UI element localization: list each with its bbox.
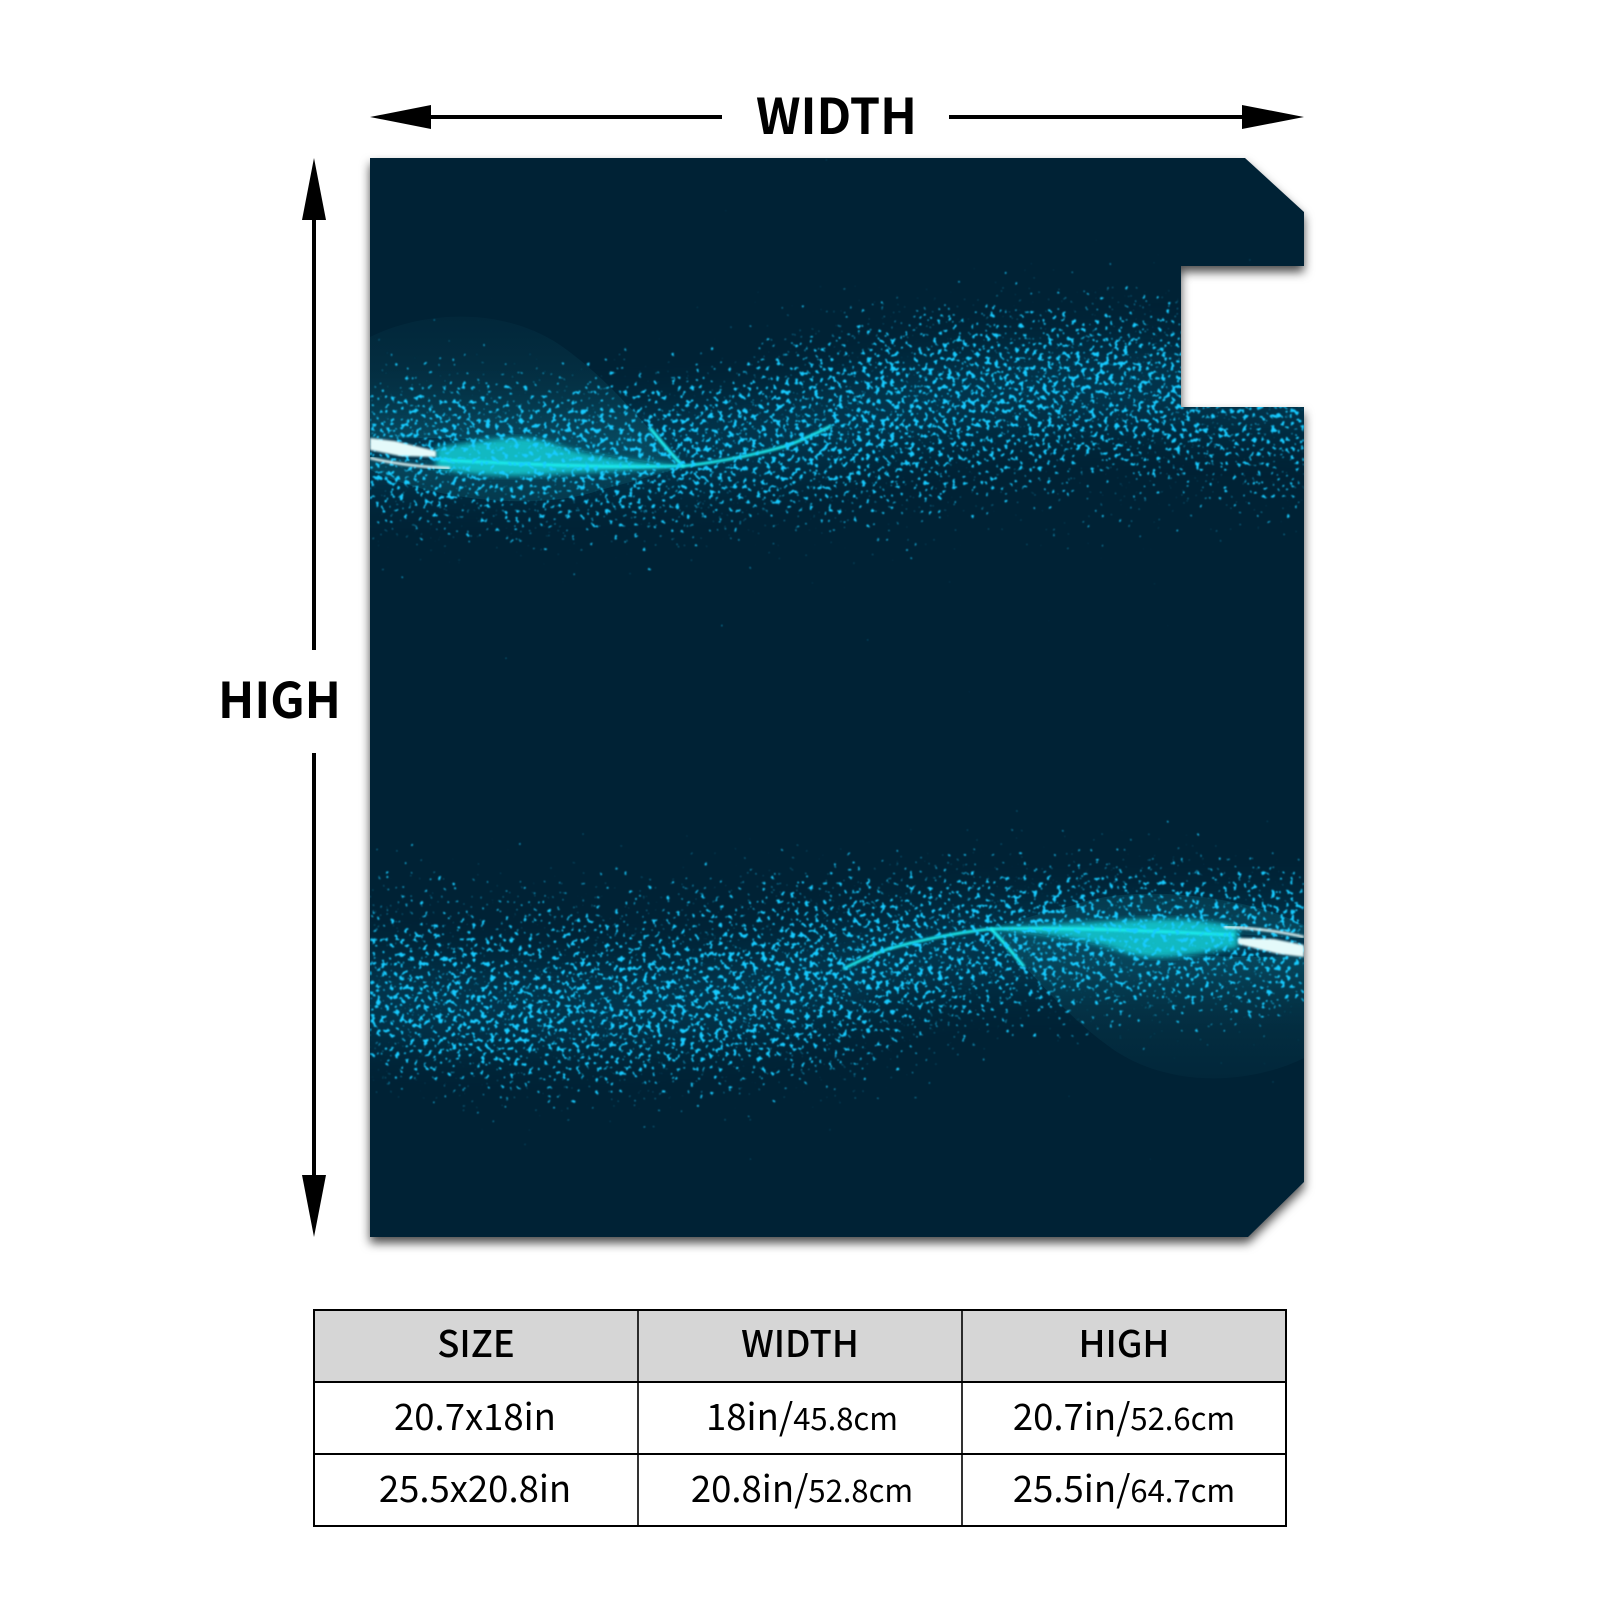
width dimension arrow: [370, 105, 1304, 129]
row 20.7x18in: 20.7x18in: [394, 1388, 556, 1441]
top glowing wave: [370, 344, 833, 502]
row 20.7x18in: 20.7in/52.6cm: [1013, 1388, 1235, 1441]
table header background: [314, 1310, 1286, 1382]
row 20.7x18in: 18in/45.8cm: [706, 1388, 898, 1441]
height dimension arrow: [302, 158, 326, 1237]
bottom soft glow: [274, 943, 1424, 1007]
top soft glow: [250, 388, 1400, 452]
row 20.7x18in: [394, 1388, 1235, 1441]
bottom particle field: [274, 853, 1424, 1097]
height label: HIGH: [218, 662, 341, 733]
bottom glowing wave: [841, 894, 1304, 1052]
panel: dark mailbox cover with particle waves: [362, 156, 1312, 1251]
header row: [437, 1315, 1169, 1368]
header row: HIGH: [1079, 1315, 1169, 1368]
row 25.5x20.8in: [379, 1460, 1235, 1513]
row 25.5x20.8in: 20.8in/52.8cm: [691, 1460, 913, 1513]
row 25.5x20.8in: 25.5in/64.7cm: [1013, 1460, 1235, 1513]
top particle field: [250, 298, 1400, 542]
header row: WIDTH: [741, 1315, 859, 1368]
width label: WIDTH: [756, 78, 917, 149]
row 25.5x20.8in: 25.5x20.8in: [379, 1460, 571, 1513]
table grid: [314, 1310, 1286, 1526]
size table: [314, 1310, 1286, 1526]
top white streak: [370, 438, 450, 468]
header row: SIZE: [437, 1315, 515, 1368]
bottom white streak: [1224, 927, 1304, 957]
